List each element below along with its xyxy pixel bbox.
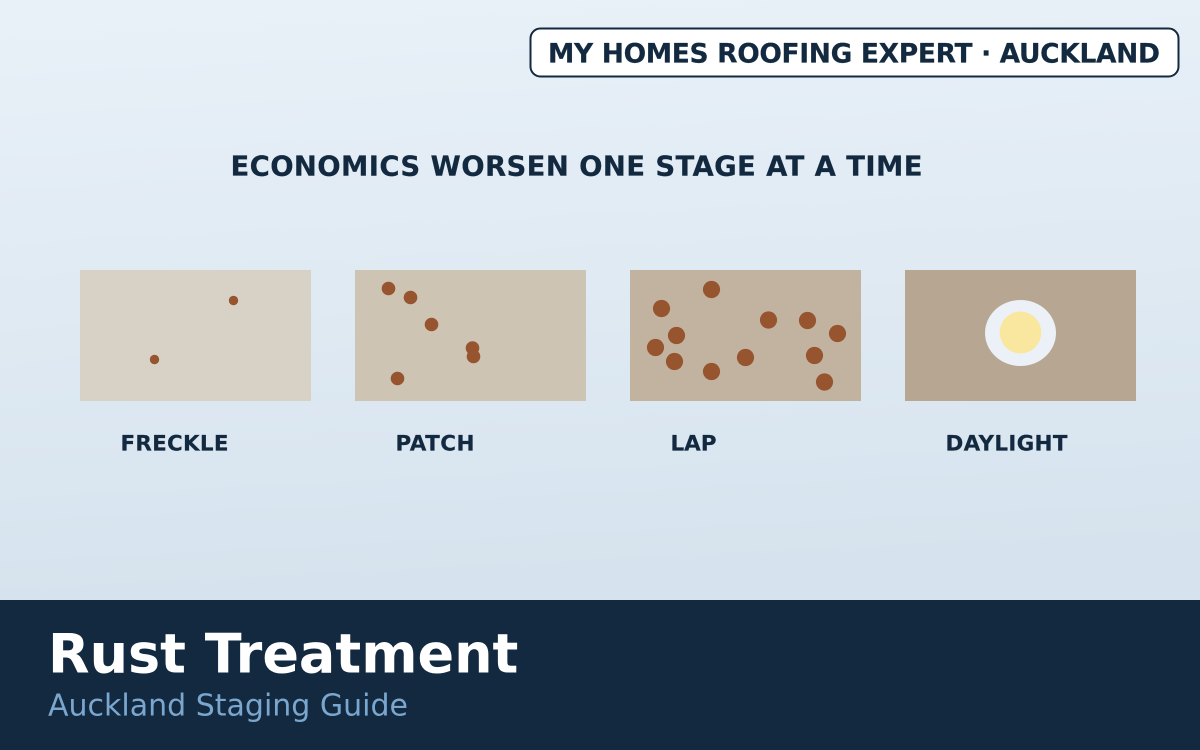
badge: brand name <box>530 28 1178 76</box>
label: daylight: DAYLIGHT <box>946 432 1068 456</box>
panel: patch stage <box>355 270 586 401</box>
footer subtitle: Auckland Staging Guide <box>48 688 408 724</box>
panel: daylight stage <box>905 270 1136 401</box>
footer title: Rust Treatment <box>48 622 518 686</box>
heading: economics worsen: ECONOMICS WORSEN ONE STAGE AT A TIME <box>230 150 922 182</box>
label: lap: LAP <box>670 432 716 456</box>
label: patch: PATCH <box>396 432 474 456</box>
panel: freckle stage <box>80 270 311 401</box>
label: freckle: FRECKLE <box>120 432 228 456</box>
footer band <box>0 600 1200 750</box>
panel: lap stage <box>630 270 861 401</box>
badge: brand name: MY HOMES ROOFING EXPERT · AUCKLAND <box>548 38 1160 70</box>
